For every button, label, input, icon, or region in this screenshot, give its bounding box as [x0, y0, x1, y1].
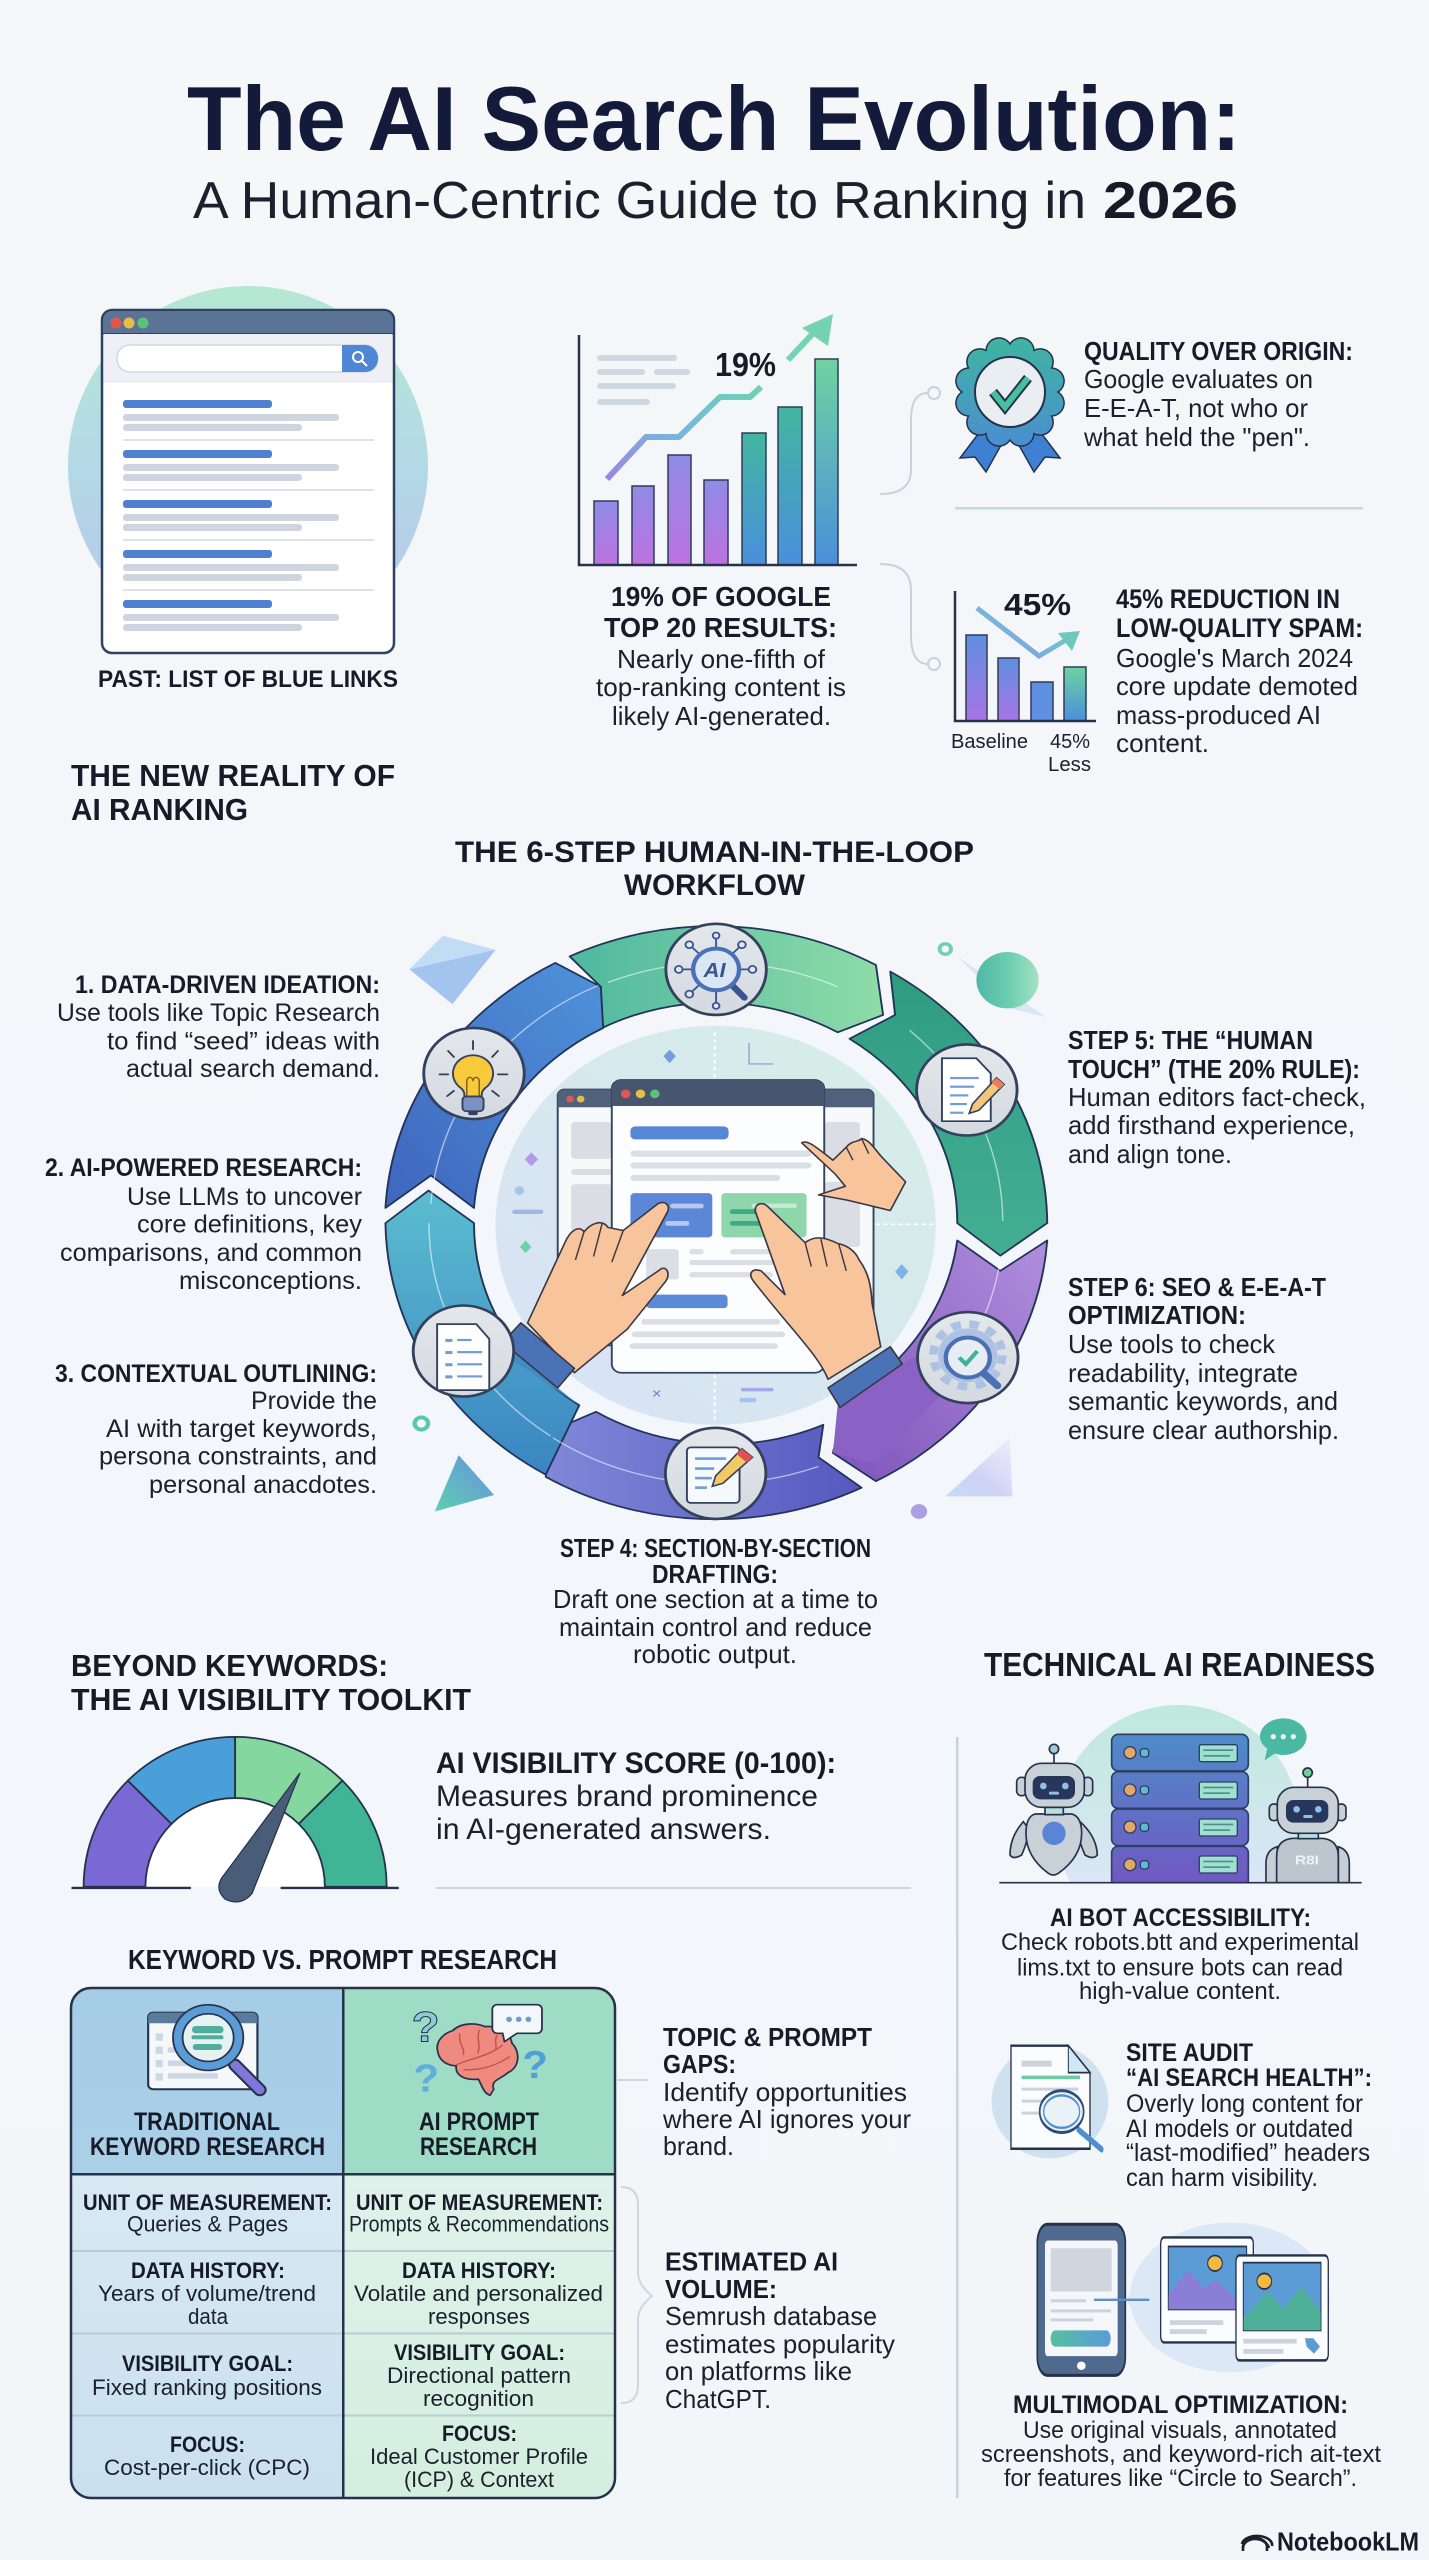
step 4 text: DRAFTING: — [652, 1559, 778, 1589]
panel: quality over origin — [956, 336, 1353, 472]
step 1 text: actual search demand. — [126, 1055, 380, 1083]
multimodal text: Use original visuals, annotated — [1023, 2417, 1337, 2444]
row: unit of measurement: Prompts & Recommendations — [349, 2212, 609, 2236]
sparkles in disc: × — [652, 1386, 661, 1403]
panel: workflow ring diagram — [385, 924, 1047, 1519]
step 5 text: and align tone. — [1068, 1139, 1232, 1169]
quality text: Google evaluates on — [1084, 364, 1313, 394]
row: focus: Cost-per-click (CPC) — [104, 2455, 310, 2480]
quality text: what held the "pen". — [1083, 422, 1310, 452]
heading: beyond keywords — [71, 1648, 471, 1717]
19% text: top-ranking content is — [596, 672, 846, 702]
45% text: mass-produced AI — [1116, 700, 1321, 730]
table headers: AI PROMPT — [419, 2108, 539, 2136]
backdrop circle — [68, 286, 428, 646]
multimodal text — [981, 2391, 1381, 2492]
estimated AI volume text: estimates popularity — [665, 2329, 895, 2359]
row: data history: Volatile and personalized — [354, 2281, 603, 2306]
step 6 text: Use tools to check — [1068, 1329, 1276, 1359]
hands — [503, 1139, 906, 1407]
step 4 text — [553, 1533, 878, 1669]
step icon circles — [413, 924, 1018, 1519]
gauge chart — [72, 1737, 399, 1902]
45% text: LOW-QUALITY SPAM: — [1116, 613, 1363, 643]
estimated AI volume text: on platforms like — [665, 2356, 852, 2386]
heading: workflow: WORKFLOW — [624, 869, 806, 902]
title: 2026 — [1103, 172, 1238, 230]
site audit text — [1126, 2039, 1372, 2192]
45% text: Google's March 2024 — [1116, 643, 1353, 673]
19% text: 19% OF GOOGLE — [611, 581, 831, 612]
step 2 text: Use LLMs to uncover — [127, 1183, 362, 1211]
cuffs — [828, 1347, 902, 1407]
site audit text: “AI SEARCH HEALTH”: — [1126, 2064, 1372, 2092]
icon: document and pencil — [917, 1044, 1017, 1135]
row: data history: Years of volume/trend — [98, 2281, 316, 2306]
step 3 text: Provide the — [251, 1387, 377, 1415]
step 3 text: personal anacdotes. — [149, 1471, 377, 1499]
upper right hand — [802, 1139, 906, 1211]
step 2 text: 2. AI-POWERED RESEARCH: — [45, 1154, 362, 1182]
right hand — [751, 1204, 881, 1379]
caption: PAST: LIST OF BLUE LINKS — [98, 666, 398, 693]
45% text: content. — [1116, 728, 1209, 758]
bar chart 19%: 19% — [715, 346, 776, 383]
heading: beyond keywords: THE AI VISIBILITY TOOLKIT — [71, 1682, 471, 1717]
step 6 text: readability, integrate — [1068, 1358, 1298, 1388]
step 6 text: OPTIMIZATION: — [1068, 1300, 1246, 1330]
AI bot accessibility text: high-value content. — [1079, 1978, 1281, 2005]
connector lines — [880, 387, 940, 670]
table headers — [90, 2108, 539, 2161]
19% text: likely AI-generated. — [612, 701, 831, 731]
heading: workflow: THE 6-STEP HUMAN-IN-THE-LOOP — [455, 836, 974, 869]
visibility score text: AI VISIBILITY SCORE (0-100): — [436, 1747, 836, 1780]
icon: ribbon badge — [956, 338, 1064, 472]
row: unit of measurement — [83, 2190, 609, 2236]
step 3 text: AI with target keywords, — [106, 1415, 377, 1443]
panel: new reality heading: AI RANKING — [71, 792, 248, 827]
decorative shapes — [409, 936, 1046, 1519]
estimated AI volume text: ESTIMATED AI — [665, 2246, 838, 2276]
centre disc — [496, 1026, 936, 1425]
topic and prompt gaps text — [662, 2022, 911, 2161]
AI bot accessibility text: AI BOT ACCESSIBILITY: — [1050, 1904, 1311, 1932]
browser windows — [558, 1080, 874, 1373]
panel: 45% reduction — [951, 584, 1363, 776]
step 2 text: comparisons, and common — [60, 1239, 362, 1267]
comparison table — [71, 1988, 615, 2498]
title — [187, 69, 1241, 230]
ring segments — [385, 926, 1047, 1519]
multimodal text: MULTIMODAL OPTIMIZATION: — [1013, 2391, 1348, 2419]
icon: brain with prompts — [412, 2004, 548, 2100]
site audit text: can harm visibility. — [1126, 2164, 1318, 2192]
right robot — [1266, 1768, 1349, 1883]
row: visibility goal: VISIBILITY GOAL: — [394, 2340, 565, 2365]
bar chart 45%: Baseline — [951, 731, 1028, 753]
quality text — [1083, 336, 1353, 452]
step 4 text: STEP 4: SECTION-BY-SECTION — [560, 1533, 871, 1563]
row: data history: data — [188, 2304, 229, 2329]
bar chart 45%: 45% — [1004, 587, 1071, 622]
icon: bots and server: R8I — [1295, 1854, 1319, 1868]
icon: phone and images — [1037, 2222, 1330, 2375]
topic and prompt gaps text: GAPS: — [663, 2049, 736, 2079]
bar chart 45%: Less — [1048, 754, 1091, 776]
table headers: KEYWORD RESEARCH — [90, 2133, 325, 2161]
step 6 text: STEP 6: SEO & E-E-A-T — [1068, 1272, 1326, 1302]
step 5 text — [1068, 1025, 1366, 1169]
panel: new reality heading — [71, 758, 395, 827]
visibility score text: in AI-generated answers. — [436, 1813, 771, 1846]
site audit text: SITE AUDIT — [1126, 2039, 1253, 2067]
visibility score text: Measures brand prominence — [436, 1780, 818, 1813]
step 5 text: Human editors fact-check, — [1068, 1082, 1366, 1112]
quality text: E-E-A-T, not who or — [1084, 393, 1308, 423]
icon: brain with prompts: ? — [413, 2056, 439, 2100]
icon: AI search network: AI — [703, 960, 727, 982]
row: visibility goal — [92, 2340, 571, 2411]
row: focus: (ICP) & Context — [404, 2467, 554, 2492]
phone — [1037, 2224, 1125, 2375]
sparkles in disc — [512, 1032, 936, 1420]
icon: AI search network — [666, 924, 766, 1015]
step 1 text — [57, 971, 380, 1083]
row: visibility goal: VISIBILITY GOAL: — [122, 2351, 293, 2376]
AI bot accessibility text: Check robots.btt and experimental — [1001, 1929, 1359, 1956]
step 6 text: semantic keywords, and — [1068, 1386, 1338, 1416]
step 4 text: maintain control and reduce — [559, 1612, 872, 1642]
browser window illustration — [102, 310, 394, 653]
site audit text: Overly long content for — [1126, 2090, 1363, 2118]
step 2 text: misconceptions. — [179, 1267, 362, 1295]
step 2 text — [45, 1154, 363, 1295]
row: data history: DATA HISTORY: — [402, 2258, 556, 2283]
step 4 text: robotic output. — [633, 1639, 797, 1669]
title: A Human-Centric Guide to Ranking in — [193, 172, 1086, 230]
icon: notepad and pencil — [665, 1428, 766, 1519]
step 3 text — [55, 1360, 377, 1499]
step 6 text: ensure clear authorship. — [1068, 1415, 1339, 1445]
step 1 text: to find “seed” ideas with — [107, 1028, 380, 1056]
left robot — [1010, 1744, 1097, 1875]
step 3 text: 3. CONTEXTUAL OUTLINING: — [55, 1360, 377, 1388]
19% text — [596, 581, 846, 731]
icon: outline document — [413, 1306, 514, 1397]
45% text: core update demoted — [1116, 671, 1358, 701]
finger creases — [575, 1139, 869, 1271]
AI bot accessibility text: lims.txt to ensure bots can read — [1017, 1954, 1343, 1982]
bar chart 45%: 45% — [1050, 731, 1090, 753]
bar chart 45% — [951, 587, 1096, 776]
icon: brain with prompts: ? — [412, 2004, 440, 2051]
row: unit of measurement: UNIT OF MEASUREMENT: — [83, 2190, 332, 2215]
table side connectors — [616, 2080, 652, 2403]
site audit text: “last-modified” headers — [1126, 2139, 1370, 2167]
estimated AI volume text: Semrush database — [665, 2301, 877, 2331]
heading: technical AI readiness: TECHNICAL AI READINESS — [984, 1646, 1375, 1683]
panel: new reality heading: THE NEW REALITY OF — [71, 758, 395, 793]
title: The AI Search Evolution: — [187, 69, 1241, 170]
45% text — [1116, 584, 1363, 758]
estimated AI volume text — [665, 2246, 895, 2414]
image card two — [1236, 2255, 1328, 2360]
row: unit of measurement: UNIT OF MEASUREMENT: — [356, 2190, 603, 2215]
step 6 text — [1068, 1272, 1339, 1445]
AI bot accessibility text — [1001, 1904, 1359, 2005]
icon: site audit document — [992, 2044, 1108, 2158]
19% text: Nearly one-fifth of — [617, 644, 826, 674]
step 5 text: add firsthand experience, — [1068, 1110, 1355, 1140]
row: data history: responses — [428, 2304, 530, 2329]
icon: gear magnifier — [918, 1312, 1018, 1403]
site audit text: AI models or outdated — [1126, 2115, 1353, 2143]
icon: light bulb — [424, 1028, 524, 1119]
topic and prompt gaps text: where AI ignores your — [662, 2104, 911, 2134]
multimodal text: for features like “Circle to Search”. — [1004, 2465, 1357, 2492]
heading: beyond keywords: BEYOND KEYWORDS: — [71, 1648, 388, 1683]
icon: keyword search magnifier — [148, 2009, 260, 2090]
icon: brain with prompts: ? — [522, 2043, 548, 2087]
panel: past list of blue links — [68, 286, 428, 693]
row: focus: Ideal Customer Profile — [370, 2444, 588, 2469]
estimated AI volume text: VOLUME: — [665, 2274, 777, 2304]
row: visibility goal: Directional pattern — [387, 2363, 571, 2388]
quality text: QUALITY OVER ORIGIN: — [1084, 336, 1353, 366]
bar chart 19% — [579, 314, 857, 565]
step 2 text: core definitions, key — [137, 1210, 363, 1238]
table headers: RESEARCH — [420, 2133, 537, 2161]
estimated AI volume text: ChatGPT. — [665, 2384, 771, 2414]
heading: keyword vs prompt: KEYWORD VS. PROMPT RESEARCH — [128, 1944, 557, 1975]
row: focus — [104, 2421, 588, 2492]
table headers: TRADITIONAL — [134, 2108, 280, 2136]
step 5 text: TOUCH” (THE 20% RULE): — [1068, 1054, 1360, 1084]
multimodal text: screenshots, and keyword-rich ait-text — [981, 2441, 1381, 2468]
row: data history: DATA HISTORY: — [131, 2258, 285, 2283]
speech bubble — [1260, 1718, 1307, 1760]
step 3 text: persona constraints, and — [99, 1442, 377, 1470]
45% text: 45% REDUCTION IN — [1116, 584, 1340, 614]
visibility score text — [436, 1747, 836, 1846]
step 1 text: 1. DATA-DRIVEN IDEATION: — [75, 971, 380, 999]
left hand — [528, 1203, 668, 1373]
topic and prompt gaps text: brand. — [663, 2131, 734, 2161]
server stack — [1112, 1734, 1248, 1883]
topic and prompt gaps text: Identify opportunities — [663, 2077, 907, 2107]
row: data history — [98, 2258, 603, 2329]
row: visibility goal: Fixed ranking positions — [92, 2375, 322, 2400]
row: visibility goal: recognition — [423, 2386, 534, 2411]
row: unit of measurement: Queries & Pages — [127, 2212, 288, 2236]
topic and prompt gaps text: TOPIC & PROMPT — [663, 2022, 872, 2052]
heading: workflow — [455, 836, 974, 902]
step 1 text: Use tools like Topic Research — [57, 999, 380, 1027]
row: focus: FOCUS: — [170, 2432, 245, 2457]
image card one — [1161, 2237, 1253, 2342]
step 4 text: Draft one section at a time to — [553, 1584, 878, 1614]
panel: 19% stat — [579, 314, 857, 731]
step 5 text: STEP 5: THE “HUMAN — [1068, 1025, 1313, 1055]
icon: bots and server — [999, 1705, 1362, 1883]
row: focus: FOCUS: — [442, 2421, 517, 2446]
19% text: TOP 20 RESULTS: — [604, 612, 837, 643]
